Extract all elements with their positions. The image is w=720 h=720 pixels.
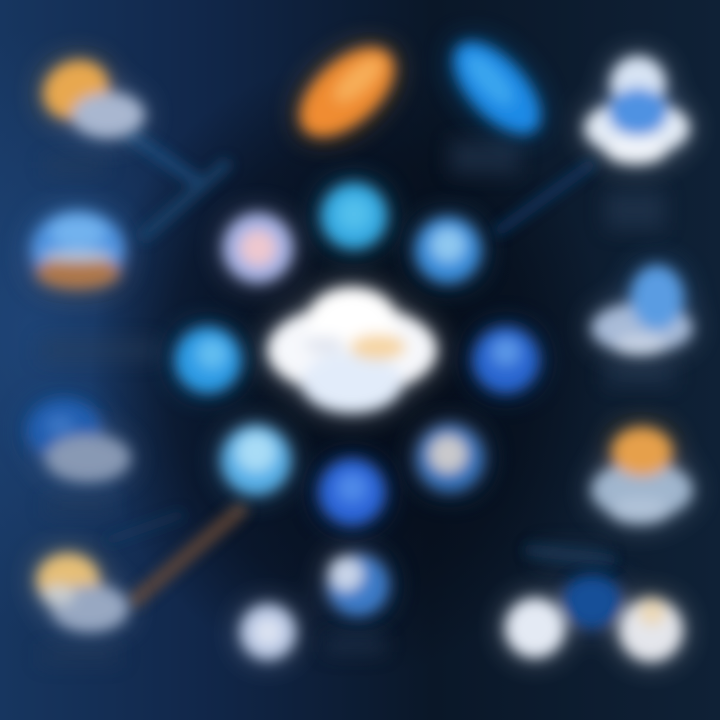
- node: bottom: [320, 460, 384, 524]
- node: left: [176, 328, 240, 392]
- icon: top right cloud: [585, 57, 689, 163]
- icon: right orange and cloud: [592, 428, 692, 523]
- icon: bottom center pair: [241, 555, 388, 659]
- icon: top orange tag: [285, 32, 409, 152]
- icon: lower left blue and cloud: [28, 400, 130, 481]
- connector lines: [110, 135, 610, 600]
- central cloud: [268, 288, 436, 412]
- icon: bottom left yellow and cloud: [37, 554, 128, 631]
- icon: top blue tag: [439, 28, 555, 148]
- icon: top left orange and cloud: [34, 51, 144, 137]
- node: lower right: [417, 425, 483, 491]
- node: upper left: [224, 214, 292, 282]
- icon: right cloud: [592, 266, 692, 355]
- node: top: [322, 184, 386, 248]
- node: right: [474, 328, 538, 392]
- ring of nodes: [176, 184, 538, 524]
- icon: left globe: [32, 212, 124, 288]
- node: upper right: [416, 218, 480, 282]
- icon: bottom right network: [506, 576, 682, 661]
- faint blurred captions: [40, 140, 675, 662]
- node: lower left: [222, 426, 290, 494]
